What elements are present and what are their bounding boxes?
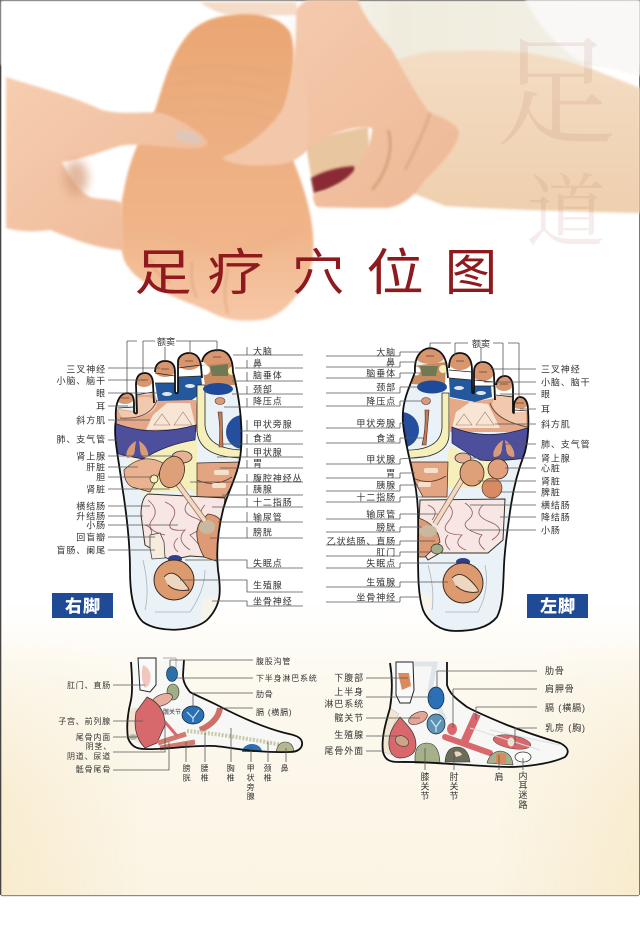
oesophagus xyxy=(218,412,223,447)
left foot labels: 失眠点 xyxy=(366,558,396,568)
inner view labels: 旁 xyxy=(247,782,255,792)
thoracic blue ellipse xyxy=(182,706,204,724)
gallbladder xyxy=(150,475,158,483)
inner view leader lines xyxy=(113,660,286,770)
panel: right foot sole chart xyxy=(110,345,245,640)
inner view labels: 腺 xyxy=(247,791,255,801)
toe slit xyxy=(175,372,178,393)
toe tendons xyxy=(470,728,560,750)
right foot labels xyxy=(56,336,303,606)
heel nerves xyxy=(428,565,486,612)
right foot labels: 小脑、脑干 xyxy=(56,375,106,386)
outer view labels: 路 xyxy=(518,799,528,810)
outer view labels: 节 xyxy=(449,791,459,801)
neck point xyxy=(417,380,447,394)
big toe detail xyxy=(202,362,238,385)
lower abdomen xyxy=(398,673,411,690)
inner view labels: 肛门、直肠 xyxy=(67,680,111,690)
inner view labels: 甲 xyxy=(247,764,255,773)
title: 疗 xyxy=(207,245,265,301)
gonad xyxy=(154,560,194,600)
badge: right foot: 右脚 xyxy=(65,596,101,616)
rib ellipse xyxy=(427,714,445,734)
inner view labels xyxy=(58,656,318,801)
diaphragm xyxy=(200,708,220,730)
right foot labels: 生殖腺 xyxy=(253,580,283,590)
shoulder xyxy=(487,751,513,765)
right foot labels: 胆 xyxy=(96,472,106,482)
left foot labels: 乙状结肠、直肠 xyxy=(327,536,396,546)
left foot labels: 心脏 xyxy=(541,462,561,474)
big toe detail xyxy=(412,362,446,386)
left foot labels: 肺、支气管 xyxy=(541,438,591,450)
inner view labels: 腹股沟管 xyxy=(256,656,291,666)
left foot labels: 小肠 xyxy=(541,526,561,536)
hip capsule xyxy=(407,709,429,727)
toe dividers xyxy=(118,365,201,408)
left foot labels: 甲状旁腺 xyxy=(356,418,396,428)
photo: hands massaging a foot xyxy=(1,0,640,321)
inner view labels: 颈 xyxy=(264,764,272,773)
kidney xyxy=(159,456,185,488)
watermark calligraphy: 道 xyxy=(526,170,606,258)
right foot labels: 胃 xyxy=(253,458,263,468)
insomnia point xyxy=(456,558,470,566)
outer view labels: 膝 xyxy=(420,771,430,782)
left foot labels: 肾上腺 xyxy=(541,452,571,464)
adrenal xyxy=(172,451,192,463)
left foot labels: 膀胱 xyxy=(376,522,396,532)
toe pads xyxy=(415,348,528,409)
eye band xyxy=(449,378,492,402)
left foot labels: 三叉神经 xyxy=(541,364,581,374)
scapula bar xyxy=(445,737,490,753)
left foot labels xyxy=(327,338,591,602)
inner view labels: 子宫、前列腺 xyxy=(58,716,111,726)
inner view labels: 腰 xyxy=(201,764,209,773)
heel band xyxy=(128,708,142,745)
stomach and pancreas xyxy=(411,462,448,497)
right foot labels: 坐骨神经 xyxy=(253,596,293,606)
right foot labels: 大脑 xyxy=(253,346,273,356)
outer view labels: 下腹部 xyxy=(334,672,364,683)
coloured sole regions xyxy=(116,350,241,629)
coloured sole regions xyxy=(404,349,528,630)
lung band xyxy=(112,422,196,459)
badge: left foot: 左脚 xyxy=(540,596,576,616)
left foot labels: 耳 xyxy=(541,404,551,414)
inner view labels: 骶骨尾骨 xyxy=(76,764,111,774)
title: 足 xyxy=(134,245,192,301)
right foot labels: 膀胱 xyxy=(253,526,273,538)
intestines xyxy=(141,494,225,560)
inner view labels: 状 xyxy=(247,772,255,782)
foot outline xyxy=(115,350,242,630)
right foot labels: 回盲瓣 xyxy=(76,532,106,542)
right foot labels: 小肠 xyxy=(86,520,106,530)
ureter xyxy=(435,478,463,524)
pelvic bars xyxy=(158,734,195,748)
diaphragm bar xyxy=(463,714,477,745)
parathyroid xyxy=(404,412,419,447)
right hand xyxy=(224,0,459,208)
right foot labels: 三叉神经 xyxy=(66,364,106,374)
right foot labels: 升结肠 xyxy=(76,510,106,522)
left foot labels: 斜方肌 xyxy=(541,418,571,430)
left foot labels: 鼻 xyxy=(386,356,396,368)
heel band xyxy=(383,708,399,755)
sole of foot xyxy=(120,14,314,321)
inner view labels: 阴道、尿道 xyxy=(67,751,111,761)
blood pressure point xyxy=(422,398,430,404)
nose xyxy=(276,742,294,752)
inner view labels: 膀 xyxy=(183,763,191,773)
lungs xyxy=(126,441,148,458)
inner view labels: 膈 (横膈) xyxy=(256,707,292,717)
right foot labels: 额窦 xyxy=(157,336,175,347)
left foot labels: 胃 xyxy=(386,468,396,478)
outer view labels: 关 xyxy=(449,780,459,792)
left foot labels: 颈部 xyxy=(376,382,396,392)
eye band xyxy=(155,376,203,401)
left foot labels: 坐骨神经 xyxy=(356,592,396,602)
sole band xyxy=(408,392,450,458)
inner view labels: 椎 xyxy=(201,772,209,782)
right foot labels: 脑垂体 xyxy=(253,370,283,380)
right foot labels: 十二指肠 xyxy=(253,496,293,508)
watermark calligraphy: 足 xyxy=(496,28,616,161)
neck point xyxy=(203,383,233,395)
panel: left foot sole chart xyxy=(400,345,535,640)
lymph ellipse xyxy=(428,687,444,709)
capsule xyxy=(150,691,174,709)
inner sole L-band xyxy=(197,385,245,458)
parathyroid xyxy=(242,744,262,752)
left foot labels: 小脑、脑干 xyxy=(541,376,591,388)
left foot labels: 肾脏 xyxy=(541,476,561,486)
left foot labels: 胰腺 xyxy=(376,480,396,490)
badge: left foot xyxy=(527,594,588,618)
liver xyxy=(124,459,163,492)
left foot labels: 生殖腺 xyxy=(366,576,396,588)
outer view labels: 肋骨 xyxy=(545,666,565,676)
parathyroid xyxy=(226,415,241,449)
toe whites xyxy=(445,366,527,415)
title: 图 xyxy=(445,245,497,301)
spine xyxy=(187,731,282,745)
outer view labels: 生殖腺 xyxy=(334,729,364,740)
elbow xyxy=(445,747,470,762)
right foot labels: 降压点 xyxy=(253,396,283,406)
watermark calligraphy xyxy=(496,28,616,258)
inner view labels: 椎 xyxy=(264,772,272,782)
outer view labels: 髋关节 xyxy=(334,712,364,723)
right foot labels: 肺、支气管 xyxy=(56,434,106,444)
right foot labels: 斜方肌 xyxy=(76,414,106,426)
rib ellipse xyxy=(167,684,179,700)
inner view labels: 胸 xyxy=(227,763,235,773)
spleen xyxy=(482,478,502,498)
outer view labels xyxy=(324,666,586,810)
left hand xyxy=(6,77,208,250)
panel: inner side view of foot xyxy=(127,658,302,752)
solar plexus region xyxy=(130,440,197,495)
outer view labels: 肩 xyxy=(494,771,504,782)
right foot labels: 肝脏 xyxy=(86,462,106,472)
outer view leader lines xyxy=(366,671,537,770)
right foot labels: 眼 xyxy=(96,388,106,398)
outer view labels: 尾骨外面 xyxy=(324,745,364,756)
gonad xyxy=(443,563,483,603)
left foot leader lines xyxy=(326,343,536,602)
left foot labels: 食道 xyxy=(376,432,396,444)
outer view labels: 内 xyxy=(518,770,528,781)
right foot labels: 胰腺 xyxy=(253,484,273,494)
heart xyxy=(488,459,508,479)
right foot labels: 肾脏 xyxy=(86,484,106,494)
bladder xyxy=(197,514,222,562)
lung band xyxy=(452,427,530,461)
outline xyxy=(383,662,568,767)
lymph ellipse xyxy=(166,666,178,682)
right foot labels: 甲状旁腺 xyxy=(253,418,293,430)
intestines xyxy=(418,499,505,560)
hip text: 髋关节 xyxy=(163,708,181,716)
right foot labels: 盲肠、阑尾 xyxy=(56,544,106,556)
outline xyxy=(127,660,302,752)
foot fill xyxy=(127,660,302,752)
left foot labels: 输尿管 xyxy=(366,508,396,520)
left foot labels: 降结肠 xyxy=(541,512,571,522)
outer view labels: 膈 (横膈) xyxy=(545,702,586,713)
ascending colon xyxy=(150,533,165,559)
left foot labels: 降压点 xyxy=(366,396,396,406)
rectum panel xyxy=(138,658,156,692)
title xyxy=(134,245,497,301)
left foot labels: 额窦 xyxy=(472,338,490,349)
outer view labels: 上半身 xyxy=(334,686,364,697)
uterus xyxy=(135,697,165,748)
ball of foot xyxy=(450,398,530,432)
stomach and pancreas xyxy=(197,462,240,497)
inner view labels: 肋骨 xyxy=(256,689,274,699)
outer view labels: 肘 xyxy=(449,772,459,782)
adrenal xyxy=(455,453,471,463)
left foot labels: 横结肠 xyxy=(541,500,571,510)
top panel xyxy=(396,662,414,703)
foot outline xyxy=(403,348,528,631)
inner view labels: 胱 xyxy=(183,772,191,782)
right foot labels: 颈部 xyxy=(253,384,273,394)
bladder xyxy=(414,517,440,557)
plexus region xyxy=(446,445,492,488)
outer view labels: 淋巴系统 xyxy=(324,698,364,709)
outer view labels: 迷 xyxy=(518,789,528,800)
right foot labels: 腹腔神经丛 xyxy=(253,472,303,484)
outer view labels: 肩胛骨 xyxy=(545,683,575,694)
kidney xyxy=(460,460,484,486)
toe dividers xyxy=(449,370,528,411)
left foot labels: 大脑 xyxy=(376,346,396,358)
right foot labels: 甲状腺 xyxy=(253,446,283,458)
right foot labels: 食道 xyxy=(253,432,273,444)
left foot labels: 脾脏 xyxy=(541,486,561,498)
toe whites xyxy=(118,362,205,405)
outer view labels: 乳房 (胸) xyxy=(545,722,586,733)
badge: right foot xyxy=(52,593,113,618)
right foot labels: 鼻 xyxy=(253,358,263,368)
anus point xyxy=(431,544,443,554)
title: 位 xyxy=(366,245,424,301)
tailbone marker xyxy=(129,734,137,740)
panel: outer side view of foot xyxy=(383,662,568,767)
left foot labels: 肛门 xyxy=(376,546,396,558)
heel nerves xyxy=(143,560,205,612)
inner ear xyxy=(515,752,531,762)
lungs xyxy=(493,440,514,457)
outer view labels: 节 xyxy=(420,791,430,801)
tendon xyxy=(414,664,445,720)
left foot labels: 眼 xyxy=(541,390,551,400)
gonad xyxy=(389,717,416,758)
right foot labels: 肾上腺 xyxy=(76,450,106,462)
right foot leader lines xyxy=(108,341,303,606)
toe pads xyxy=(116,350,233,404)
knee xyxy=(415,743,440,763)
foot fill xyxy=(383,662,568,767)
right foot labels: 失眠点 xyxy=(253,558,283,568)
right foot labels: 输尿管 xyxy=(253,512,283,522)
left foot labels: 甲状腺 xyxy=(366,454,396,464)
inner view labels: 椎 xyxy=(227,772,235,782)
inner view labels: 阴茎、 xyxy=(86,741,112,751)
right foot labels: 耳 xyxy=(96,402,106,412)
inner view labels: 尾骨内面 xyxy=(76,732,111,742)
outer view labels: 关 xyxy=(420,780,430,792)
oesophagus xyxy=(422,410,429,445)
ureter xyxy=(175,480,205,521)
right foot labels: 横结肠 xyxy=(76,500,106,512)
title: 穴 xyxy=(292,245,344,301)
breast xyxy=(492,732,532,752)
inner view labels: 下半身淋巴系统 xyxy=(256,673,318,683)
ankle top bar xyxy=(163,658,176,668)
inner view labels: 鼻 xyxy=(281,763,289,773)
outer view labels: 耳 xyxy=(518,780,528,790)
left foot labels: 十二指肠 xyxy=(356,492,396,502)
ball of foot xyxy=(116,394,197,432)
insomnia point xyxy=(168,555,182,561)
blood pressure point xyxy=(215,398,225,404)
left foot labels: 脑垂体 xyxy=(366,368,396,378)
